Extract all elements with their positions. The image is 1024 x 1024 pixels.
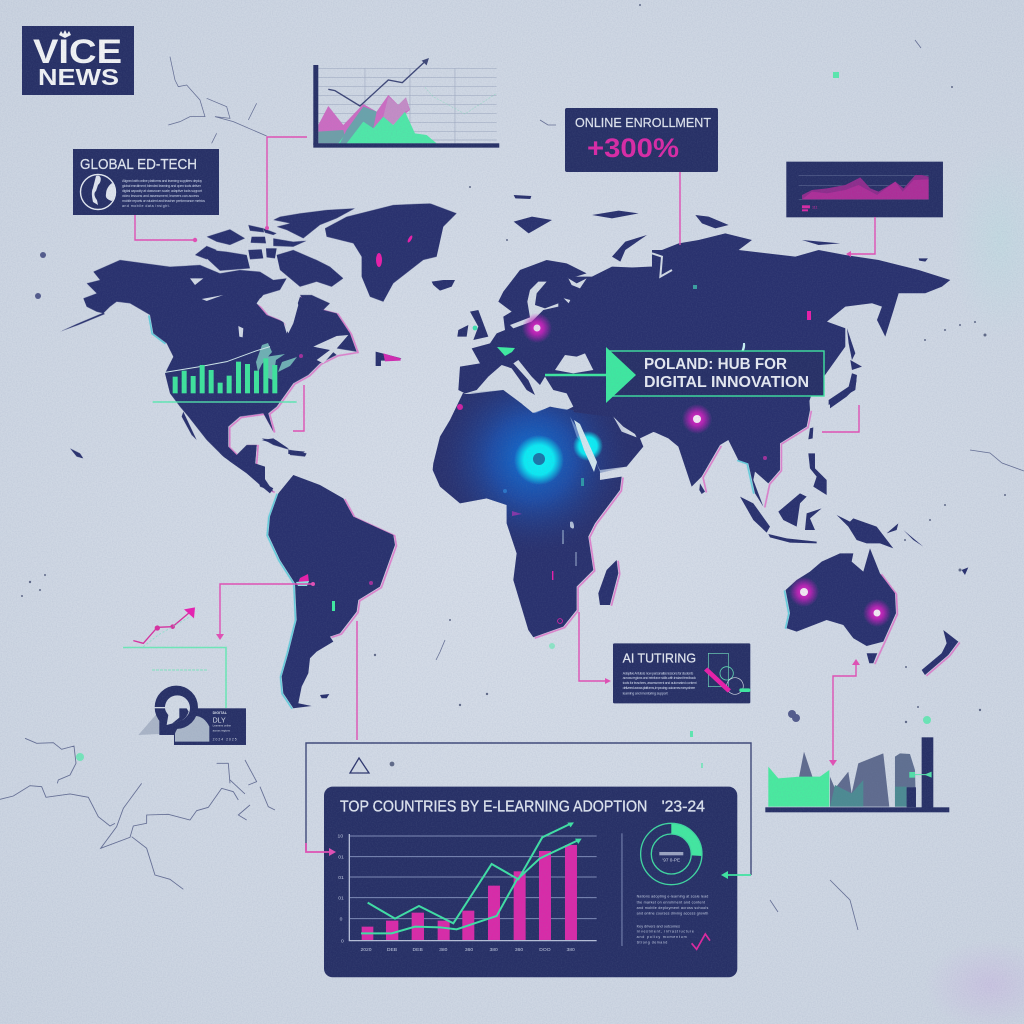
- side text: Nations adopting e-learning at scale lead: [637, 895, 708, 899]
- connector: small chart to Siberia: [846, 217, 875, 257]
- continent: North America: [60, 203, 457, 492]
- small map marks: [76, 72, 931, 768]
- body text: and mobile data insight.: [122, 204, 170, 208]
- bar and line chart: 2020: [360, 947, 372, 953]
- bar and line chart: 380: [489, 947, 498, 953]
- connector: green lines lower left: [123, 648, 226, 708]
- year label: '23-24: [662, 799, 705, 816]
- body text: digital capacity at classroom scale; adaptive tools support: [122, 189, 202, 193]
- glow: Poland magenta marker: [522, 313, 552, 343]
- bar and line chart: 01: [338, 896, 344, 902]
- panel: Top countries by e-learning adoption: [324, 787, 737, 977]
- panel: small magenta area chart: 111: [812, 205, 818, 209]
- bar and line chart: DOO: [539, 947, 551, 953]
- panel: AI Tutoring: Adaptive AI tutors now personalize lessons for students: [623, 671, 693, 675]
- icon and mini panel: speech bubble: DLY: [213, 717, 226, 724]
- bar and line chart: 0: [341, 939, 344, 945]
- panel: AI Tutoring: tools for teachers, assessment and automated content: [623, 681, 697, 685]
- connector: USA to Gulf: [293, 385, 304, 431]
- side text: and mobile deployment across schools: [637, 906, 708, 910]
- continent: South Asia and Oceania: [610, 380, 968, 675]
- panel: small magenta area chart: [786, 162, 943, 217]
- panel: Online Enrollment: [565, 108, 718, 172]
- frame: bottom panel outline: [306, 743, 751, 875]
- connector: South America to bottom panel: [356, 621, 358, 740]
- side text: [637, 895, 708, 945]
- logo: VICE: [33, 33, 122, 71]
- cyan chromatic coast edges: [149, 315, 789, 709]
- icon: globe: [80, 174, 116, 210]
- glow: West Australia marker: [789, 577, 819, 607]
- chart: bottom right area chart: [765, 737, 949, 812]
- bar and line chart: 360: [465, 947, 473, 953]
- connector: Africa to AI Tutoring: [579, 612, 611, 684]
- arrow: pink into panel: [306, 843, 336, 856]
- logo: NEWS: [38, 64, 119, 90]
- heading: Global Ed-Tech: GLOBAL ED-TECH: [80, 157, 197, 173]
- panel: AI Tutoring: delivered across platforms, improving outcomes everywhere: [623, 686, 695, 690]
- glow: Africa cyan hub: [454, 390, 628, 544]
- callout: Poland hub: DIGITAL INNOVATION: [644, 374, 809, 391]
- panel: AI Tutoring: across regions and reinforce skills with instant feedback: [623, 676, 696, 680]
- icon and mini panel: speech bubble: DIGITAL: [213, 711, 228, 715]
- bar and line chart: 10: [338, 834, 343, 840]
- bar and line chart: DEB: [387, 947, 398, 953]
- side text: Investment, infrastructure: [637, 930, 694, 934]
- connector: area chart to Canada: [265, 137, 307, 230]
- icon and mini panel: speech bubble: [138, 686, 246, 745]
- logo: [22, 26, 134, 95]
- body text: video lessons and assessment; learners can access: [122, 194, 199, 198]
- glow: East Australia marker: [863, 599, 891, 627]
- trend arrow: lower left: [133, 607, 195, 647]
- bar and line chart: 380: [439, 947, 448, 953]
- seas cut out of land: [190, 253, 672, 470]
- continent: South America and Africa: [220, 390, 622, 708]
- side text: the market on enrollment and content: [637, 900, 705, 904]
- side text: and online courses driving access growth: [637, 911, 708, 915]
- body text: [122, 179, 205, 208]
- panel: AI Tutoring: AI TUTIRING: [623, 651, 696, 665]
- bar and line chart: 380: [566, 947, 575, 953]
- bar and line chart: 01: [338, 875, 344, 881]
- connector: Online Enrollment to Russia: [679, 172, 681, 245]
- continent: Russia and North Asia: [512, 195, 950, 413]
- donut chart: [641, 823, 702, 885]
- body text: mobile reports on student and teacher performance metrics: [122, 199, 205, 203]
- connector: Global Ed-Tech to Canada: [135, 215, 197, 242]
- continent: Europe and Middle East: [432, 260, 680, 470]
- connector: South America to lower left: [216, 582, 315, 640]
- arrow: green into panel: [721, 871, 751, 879]
- icon and mini panel: speech bubble: across regions: [213, 728, 231, 732]
- bar and line chart: DEB: [413, 947, 423, 953]
- icon and mini panel: speech bubble: Learners online: [213, 724, 231, 728]
- connector: Australia to bottom chart: [829, 659, 860, 766]
- bar and line chart: 01: [338, 855, 344, 861]
- chart: top area chart: [313, 58, 499, 148]
- panel: Online Enrollment: ONLINE ENROLLMENT: [575, 115, 711, 130]
- world map: [60, 72, 968, 768]
- pink chromatic coast edges: [230, 297, 960, 676]
- specks: [21, 4, 1006, 766]
- side text: Strong demand: [637, 941, 667, 945]
- chart: USA bars: [153, 347, 297, 403]
- connector: Poland to Japan: [822, 405, 859, 432]
- glow: Asia magenta marker: [682, 404, 712, 434]
- panel: AI Tutoring: learning and mentoring support: [623, 692, 668, 696]
- bar and line chart: [338, 822, 597, 953]
- panel: Online Enrollment: +300%: [587, 133, 679, 163]
- icon: triangle: [350, 758, 369, 773]
- bar and line chart: 0: [340, 916, 343, 922]
- side text: and policy momentum: [637, 935, 687, 939]
- body text: Aligned with online platforms and learning suppliers deploy: [122, 179, 202, 183]
- callout: Poland hub: POLAND: HUB FOR: [644, 356, 787, 373]
- callout: Poland hub: [545, 347, 824, 403]
- panel: AI Tutoring: [613, 643, 750, 703]
- icon and mini panel: speech bubble: 2024 2025: [213, 738, 237, 742]
- Great Lakes highlights: [256, 343, 297, 380]
- donut chart: '97 0-PE: [662, 857, 680, 862]
- side text: Key drivers and outcomes: [637, 925, 680, 929]
- heading: TOP COUNTRIES BY E-LEARNING ADOPTION: [340, 799, 647, 816]
- body text: global enrollment; blended learning and open tools deliver: [122, 184, 202, 188]
- panel: Global Ed-Tech: [73, 149, 219, 215]
- icon: check mark: [692, 934, 710, 949]
- bar and line chart: 360: [515, 947, 523, 953]
